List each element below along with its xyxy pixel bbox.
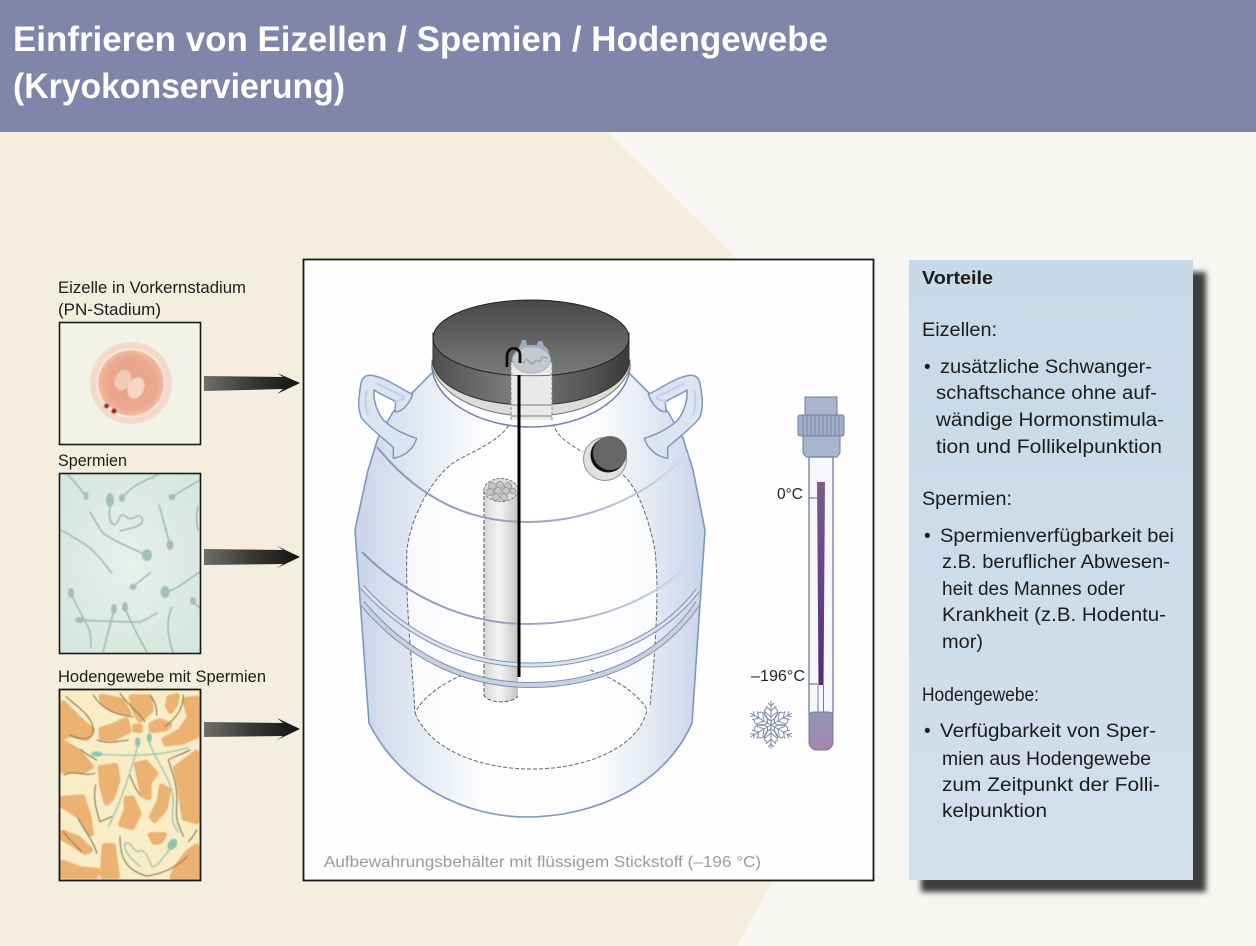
container neck and lid [432, 300, 630, 427]
section: Spermien: heit des Mannes oder [942, 579, 1126, 600]
section: Hodengewebe: zum Zeitpunkt der Folli- [942, 775, 1160, 796]
gear plug [512, 340, 550, 373]
section: Eizellen: schaftschance ohne auf- [936, 383, 1157, 404]
heading: Vorteile [922, 268, 993, 288]
icon: left handle [359, 375, 417, 458]
section: Hodengewebe: Verfügbarkeit von Sper- [940, 721, 1156, 742]
section: Spermien: • [924, 526, 931, 547]
title banner: Einfrieren von Eizellen / Spemien / Hodengewebe [13, 20, 828, 59]
section: Hodengewebe: • [924, 721, 931, 742]
section: Hodengewebe: kelpunktion [942, 801, 1047, 822]
rod through neck [518, 375, 520, 435]
cap [798, 397, 844, 457]
section: Spermien: Spermienverfügbarkeit bei [940, 526, 1174, 547]
section: Spermien [922, 489, 1174, 653]
section: Eizellen: tion und Follikelpunktion [936, 437, 1162, 458]
purple sample bar [817, 482, 825, 685]
section: Spermien: z.B. beruflicher Abwesen- [942, 552, 1170, 573]
section: Eizellen: Eizellen: [922, 320, 997, 341]
section: Eizellen: zusätzliche Schwanger- [940, 357, 1152, 378]
section: Hodengewebe: mien aus Hodengewebe [942, 749, 1151, 770]
thermometer tube [798, 397, 844, 750]
section: Spermien: Spermien: [922, 489, 1012, 510]
panel: Vorteile [909, 260, 1206, 892]
section: Eizellen: • [924, 357, 931, 378]
label: 0 degrees: 0°C [777, 486, 803, 503]
stopper [809, 712, 833, 750]
icon: snowflake [747, 701, 795, 749]
container body [355, 373, 705, 817]
label: Eizelle in Vorkernstadium: Eizelle in Vorkernstadium [58, 279, 246, 297]
panel: storage container frame [304, 260, 874, 880]
rod hook [507, 348, 520, 367]
panel shadow [921, 272, 1206, 892]
panel: testicular tissue image [60, 690, 200, 880]
panel: sperm image [60, 474, 200, 654]
label: Spermien: Spermien [58, 452, 127, 470]
arrow: tissue to container [204, 718, 300, 740]
section: Spermien: mor) [942, 632, 983, 653]
neck tube [511, 362, 552, 420]
panel: egg cell image [60, 322, 200, 444]
arrow: egg to container [204, 373, 300, 394]
inner storage canister [484, 478, 518, 702]
label: Eizelle in Vorkernstadium [58, 279, 246, 319]
section: Spermien: Krankheit (z.B. Hodentu- [942, 605, 1166, 626]
arrow: sperm to container [204, 546, 300, 568]
label: Eizelle in Vorkernstadium: (PN-Stadium) [58, 301, 161, 319]
panel background [909, 260, 1193, 880]
section: Eizellen [922, 320, 1164, 458]
icon: right handle [644, 375, 702, 458]
valve knob [584, 436, 627, 480]
container rings [362, 447, 698, 685]
title banner [0, 0, 1256, 132]
section: Hodengewebe [922, 685, 1160, 822]
storage rod [518, 374, 520, 677]
title banner: (Kryokonservierung) [13, 67, 345, 106]
inner vessel [407, 420, 657, 769]
section: Hodengewebe: Hodengewebe: [922, 685, 1039, 706]
label: Hodengewebe mit Spermien: Hodengewebe mit Spermien [58, 668, 266, 686]
caption: Aufbewahrungsbehälter mit flüssigem Stickstoff (–196 °C) [324, 854, 761, 871]
section: Eizellen: wändige Hormonstimula- [935, 410, 1164, 431]
label: minus 196 degrees: –196°C [751, 668, 805, 685]
